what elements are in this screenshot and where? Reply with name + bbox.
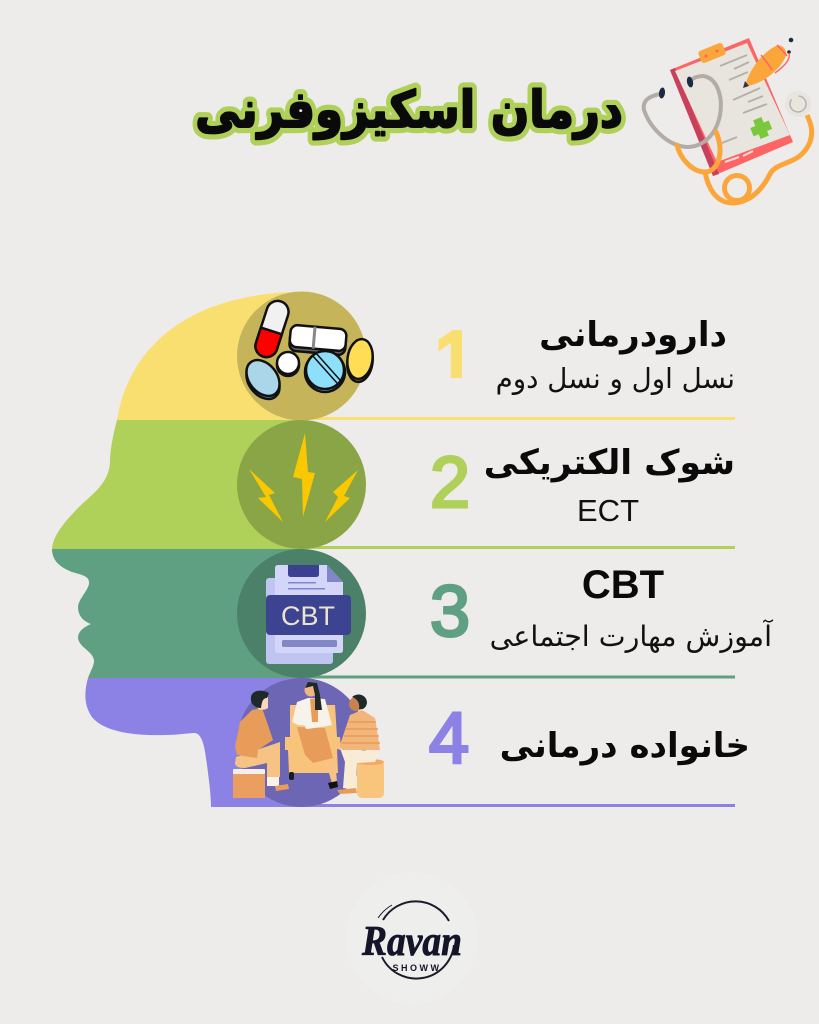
circle: shock background bbox=[237, 420, 366, 549]
head: yellow band bbox=[117, 292, 301, 420]
icon: lightning bolts bbox=[249, 433, 358, 522]
icon: CBT document bbox=[266, 565, 351, 664]
logo bbox=[346, 872, 478, 1004]
row 1 heading: دارودرمانی bbox=[539, 315, 727, 355]
right person bbox=[337, 695, 380, 794]
pouf bbox=[357, 759, 384, 798]
divider: teal bbox=[301, 676, 735, 678]
CBT label: CBT bbox=[281, 601, 335, 631]
row 3 number: 3 bbox=[430, 572, 470, 652]
row 4 number: 4 bbox=[429, 699, 469, 779]
row 1 number: 1 bbox=[433, 315, 477, 404]
divider: green bbox=[301, 546, 735, 549]
pen bbox=[743, 38, 793, 88]
circle: family background bbox=[237, 678, 366, 807]
logo wordmark: Ravan bbox=[361, 919, 462, 965]
row 2 heading: شوک الکتریکی bbox=[484, 443, 735, 483]
row 2 number: 2 bbox=[430, 443, 470, 523]
title: درمان اسکیزوفرنی bbox=[195, 82, 623, 140]
head: purple band bbox=[85, 678, 301, 807]
logo tagline: SHOWW bbox=[392, 963, 442, 973]
icon: pills bbox=[240, 298, 375, 405]
row 4 heading: خانواده درمانی bbox=[500, 726, 750, 766]
title: درمان اسکیزوفرنی bbox=[195, 82, 623, 140]
circle: CBT background bbox=[237, 549, 366, 678]
chest piece bbox=[785, 91, 811, 117]
icon: clipboard and stethoscope bbox=[644, 38, 812, 203]
grey tube bbox=[644, 76, 721, 147]
circle: pills background bbox=[237, 292, 366, 420]
divider: purple bbox=[301, 804, 735, 807]
therapist bbox=[285, 682, 341, 789]
row 3 heading: CBT bbox=[582, 563, 664, 607]
head: green band bbox=[52, 420, 301, 549]
left person bbox=[233, 691, 289, 798]
row 3 subtext: آموزش مهارت اجتماعی bbox=[490, 619, 773, 653]
divider: yellow bbox=[301, 417, 735, 420]
row 2 subtext: ECT bbox=[577, 493, 639, 528]
icon: family therapy group bbox=[233, 682, 384, 798]
head: teal band bbox=[52, 549, 301, 678]
row 1 subtext: نسل اول و نسل دوم bbox=[496, 362, 735, 395]
orange tube bbox=[677, 132, 720, 172]
